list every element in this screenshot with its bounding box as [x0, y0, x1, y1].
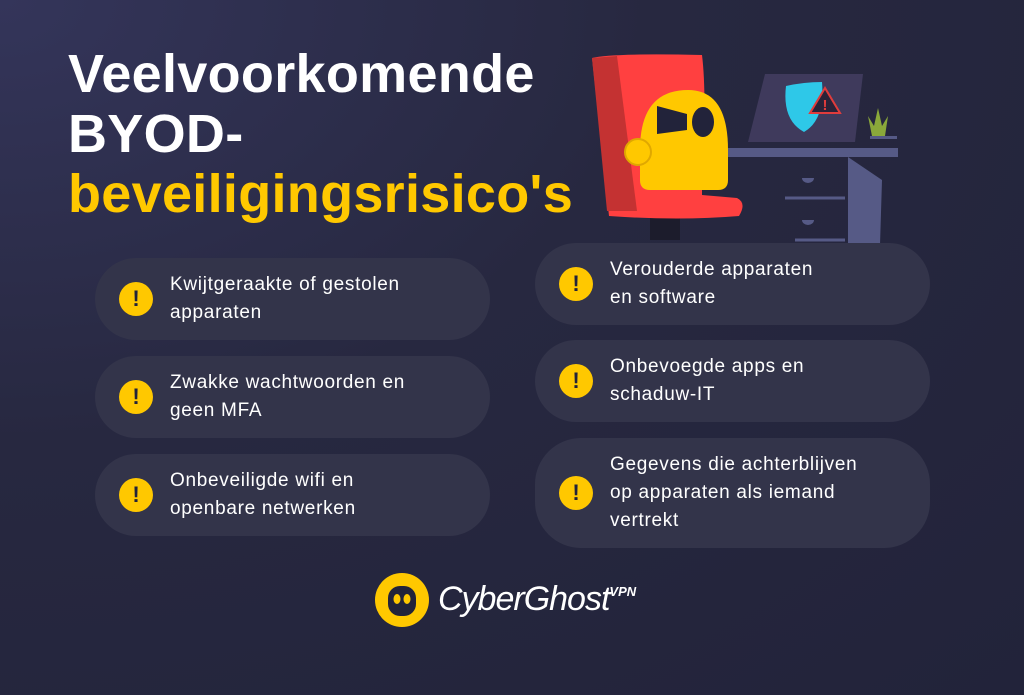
risk 2: Zwakke wachtwoorden en	[170, 372, 405, 393]
risk 4: !	[572, 271, 580, 296]
title: Veelvoorkomende	[68, 44, 535, 104]
risk 3: !	[132, 482, 140, 507]
risk 1	[95, 258, 490, 340]
risk 4: en software	[610, 287, 716, 308]
chair	[592, 54, 743, 240]
title	[68, 44, 573, 224]
risk 5: schaduw-IT	[610, 384, 715, 405]
risk 2: !	[132, 384, 140, 409]
risk 6	[535, 438, 930, 548]
laptop with shield	[748, 74, 863, 142]
risk 5: !	[572, 368, 580, 393]
risk 1: Kwijtgeraakte of gestolen	[170, 274, 400, 295]
illustration: ghost at desk	[592, 54, 898, 243]
icon: ghost logo	[375, 573, 429, 627]
risk 3: Onbeveiligde wifi en	[170, 470, 354, 491]
risk 1: !	[132, 286, 140, 311]
risk 6: vertrekt	[610, 510, 679, 531]
risk 3	[95, 454, 490, 536]
logo	[375, 573, 636, 627]
risk 5	[535, 340, 930, 422]
title: BYOD-	[68, 104, 244, 164]
risk 6: op apparaten als iemand	[610, 482, 835, 503]
laptop with shield: !	[822, 97, 828, 114]
logo text: CyberGhostVPN	[438, 580, 636, 618]
risk 2	[95, 356, 490, 438]
risk 4	[535, 243, 930, 325]
risk 4: Verouderde apparaten	[610, 259, 813, 280]
title: beveiligingsrisico's	[68, 164, 573, 224]
desk	[710, 148, 898, 245]
risk 6: Gegevens die achterblijven	[610, 454, 857, 475]
ghost	[625, 90, 728, 190]
risk 1: apparaten	[170, 302, 262, 323]
risk 6: !	[572, 480, 580, 505]
risk 2: geen MFA	[170, 400, 262, 421]
risk 5: Onbevoegde apps en	[610, 356, 804, 377]
risk 3: openbare netwerken	[170, 498, 356, 519]
plant	[868, 108, 897, 139]
